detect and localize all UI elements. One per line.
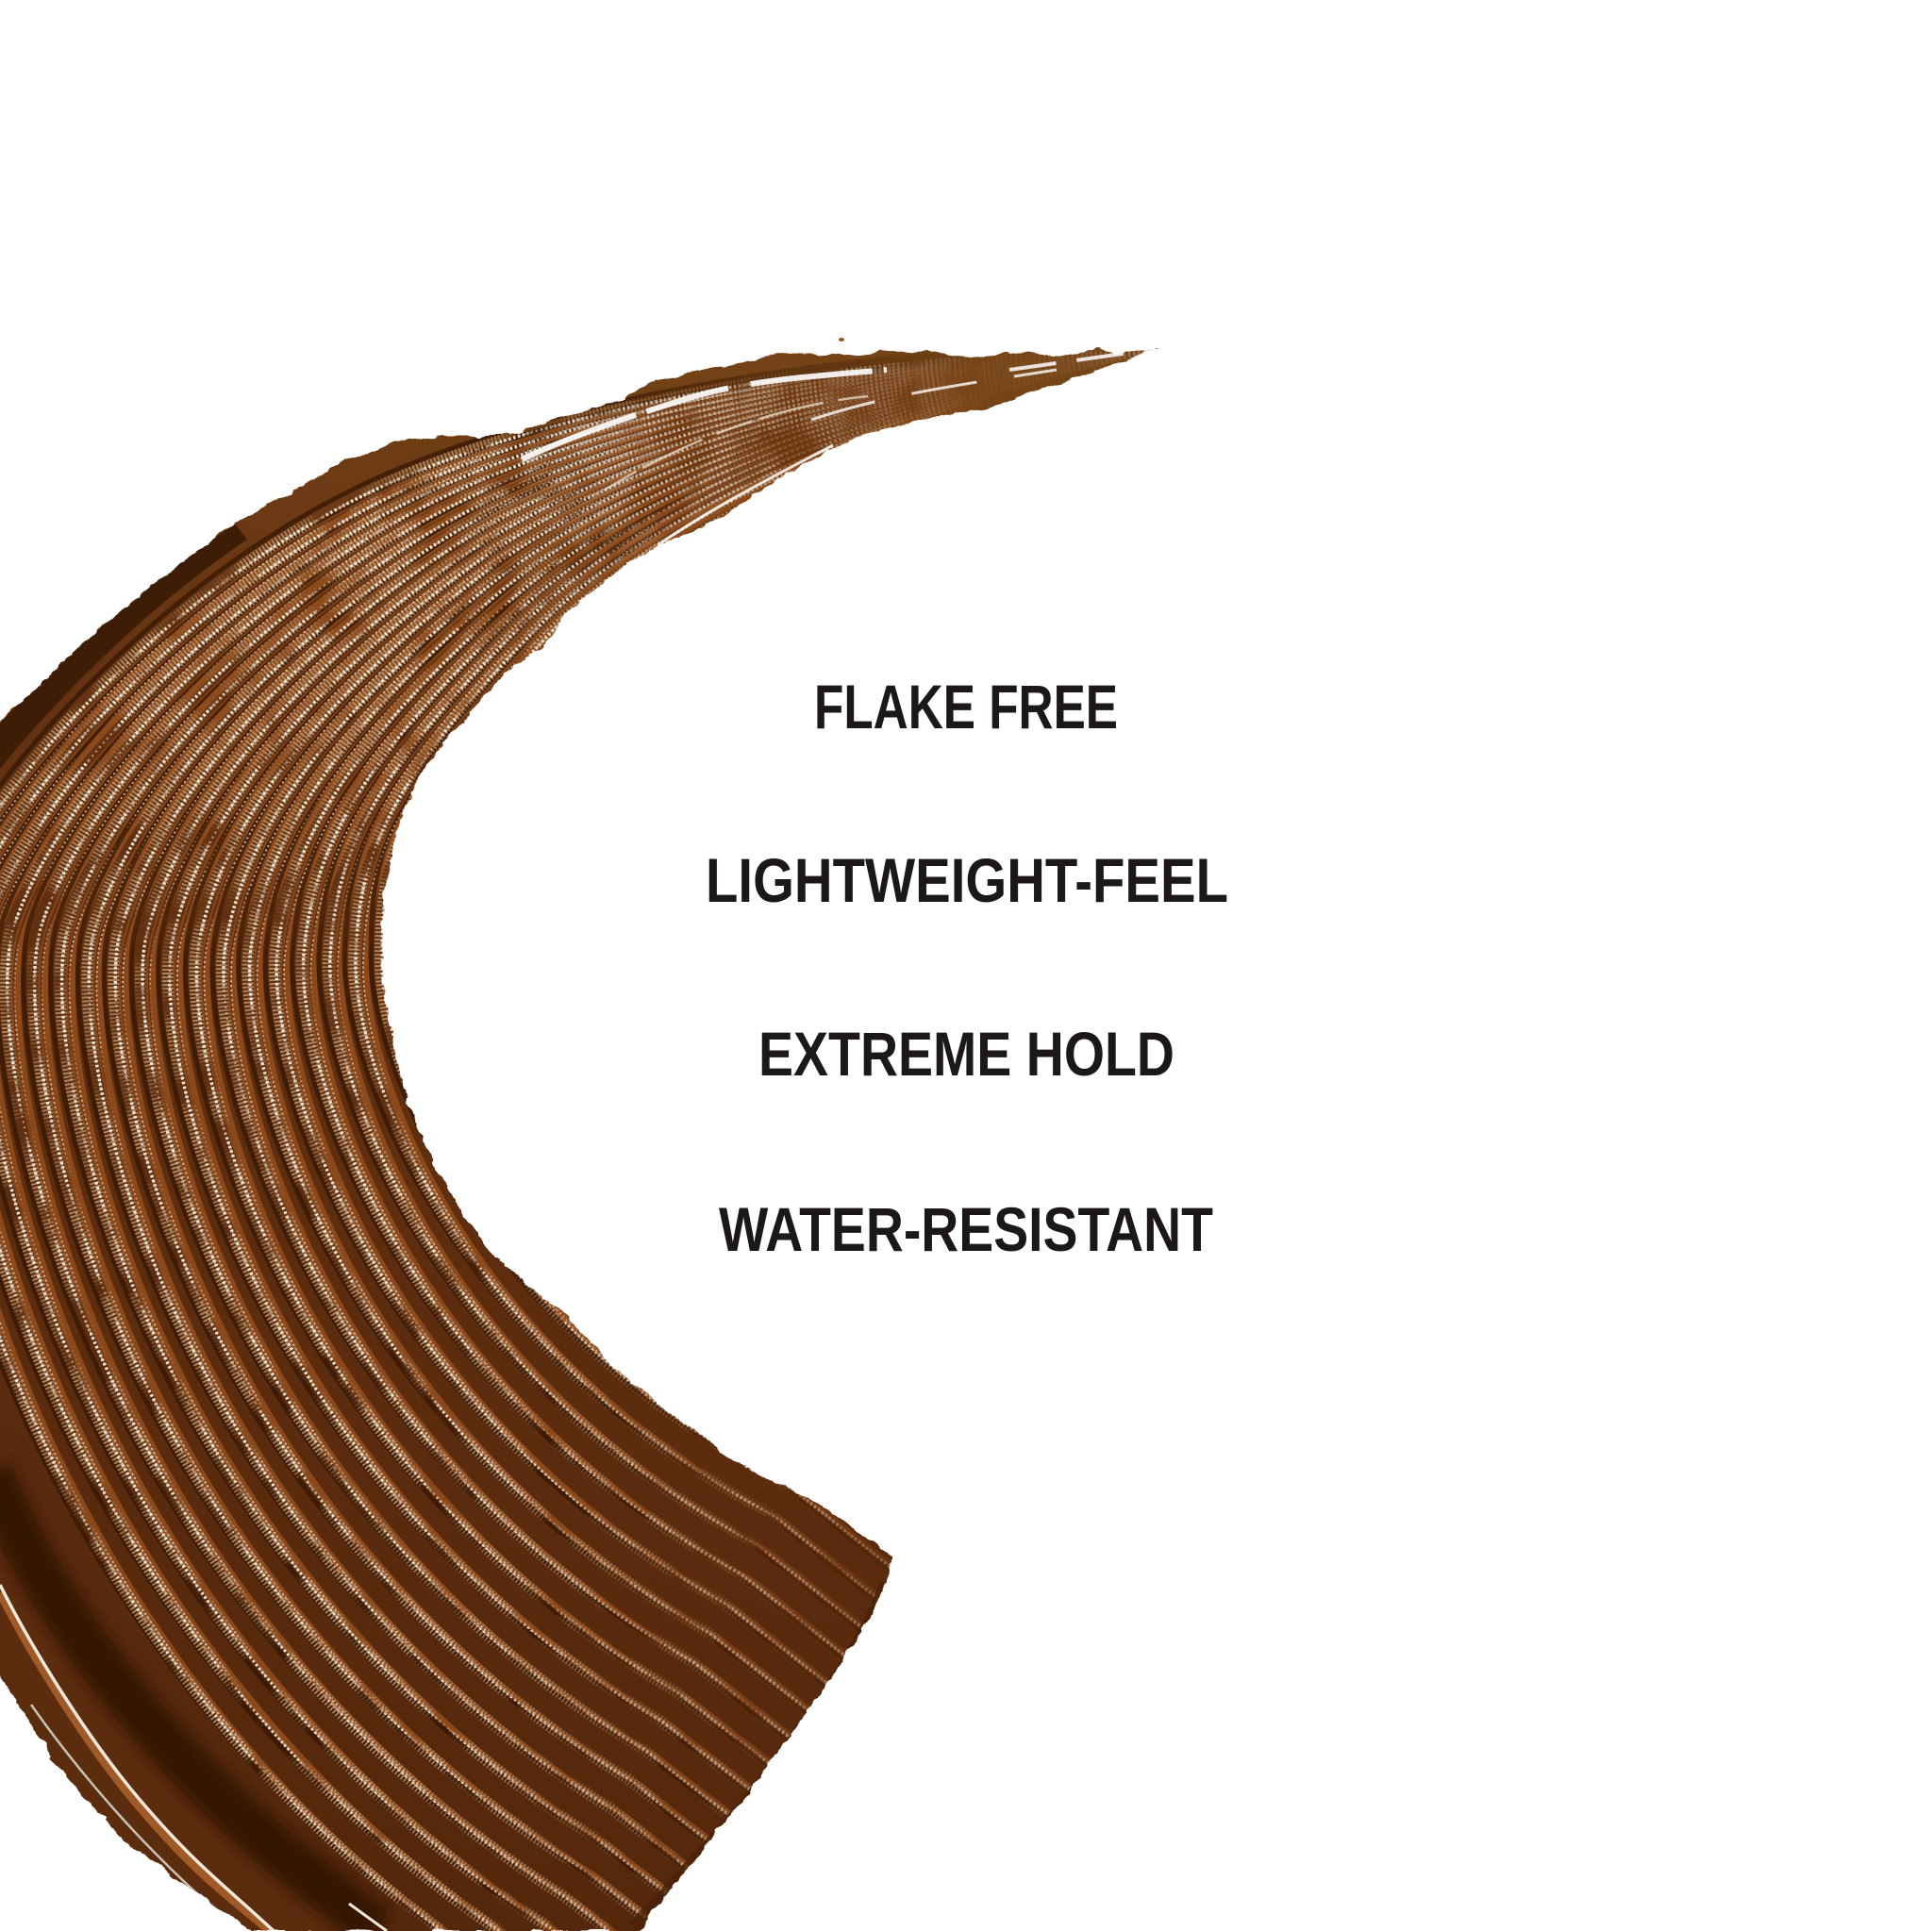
brown mascara swatch stroke xyxy=(0,321,1189,1931)
lower-left band xyxy=(0,1495,377,1931)
stray pigment speck xyxy=(839,338,844,341)
feature label: water-resistant: WATER-RESISTANT xyxy=(719,1194,1213,1264)
feature label: extreme hold: EXTREME HOLD xyxy=(758,1019,1174,1089)
feature label: flake free: FLAKE FREE xyxy=(814,672,1118,741)
lower-right dark edge xyxy=(638,1585,891,1931)
white gaps near the tapered tip xyxy=(522,370,887,459)
feature label: lightweight-feel: LIGHTWEIGHT-FEEL xyxy=(706,845,1228,915)
upper outer dark rim xyxy=(0,524,247,769)
